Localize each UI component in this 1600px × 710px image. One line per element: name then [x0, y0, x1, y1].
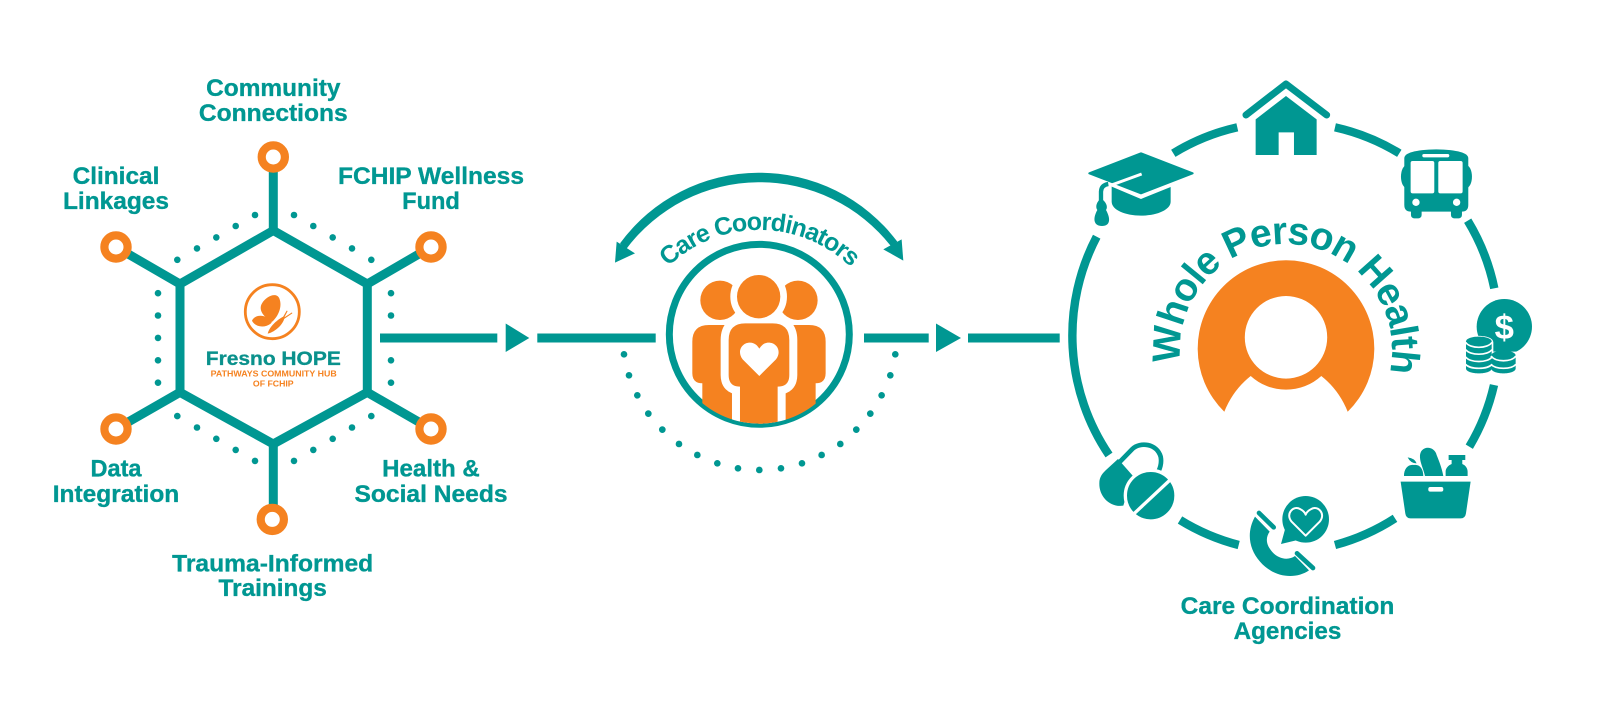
- icon: graduation cap: [1089, 153, 1193, 226]
- icon: double-headed arc arrow: [615, 173, 903, 263]
- icon: bus: [1401, 149, 1472, 218]
- label: Community Connections: Connections: [199, 100, 348, 127]
- dotted arc under circle: [621, 351, 899, 473]
- icon: phone with heart bubble: [1250, 496, 1329, 576]
- panel: Care Coordinators: [615, 172, 904, 474]
- logo: Fresno HOPE butterfly: OF FCHIP: [253, 378, 294, 388]
- icon: people with heart in circle: [669, 244, 849, 427]
- label: Data Integration: Data: [90, 456, 142, 483]
- label: FCHIP Wellness Fund: Fund: [402, 188, 460, 215]
- heading: Care Coordinators: Care Coordinators: [660, 214, 858, 265]
- orange ring nodes: [104, 145, 443, 531]
- label: Health & Social Needs: Health &: [382, 456, 480, 483]
- label: Clinical Linkages: Linkages: [63, 188, 169, 215]
- infographic: [54, 78, 1532, 644]
- icon: grocery basket: [1401, 448, 1471, 518]
- label: Care Coordination Agencies: Agencies: [1234, 618, 1341, 645]
- label: FCHIP Wellness Fund: FCHIP Wellness: [338, 163, 524, 190]
- hexagon with spokes: [116, 157, 431, 519]
- label: Trauma-Informed Trainings: Trauma-Informed: [172, 550, 373, 577]
- panel: Fresno HOPE hub: [53, 75, 524, 602]
- arrow: hub to care coordinators: [380, 324, 656, 352]
- ring segments: [1072, 127, 1494, 545]
- heading: Whole Person Health: Whole Person Health: [1152, 222, 1420, 372]
- label: Clinical Linkages: Clinical: [73, 163, 159, 190]
- panel: Whole Person Health ring: [1068, 80, 1532, 645]
- logo: Fresno HOPE butterfly: PATHWAYS COMMUNITY HUB: [211, 369, 337, 379]
- icon: medicine pills: [1099, 445, 1176, 521]
- label: Community Connections: Community: [206, 75, 341, 102]
- icon: person silhouette: [1198, 260, 1374, 412]
- label: Care Coordination Agencies: Care Coordination: [1181, 593, 1394, 620]
- arrow: care coordinators to whole person health: [864, 324, 1060, 352]
- icon: house: [1246, 84, 1327, 155]
- dotted hexagon outline: [155, 212, 394, 464]
- logo: Fresno HOPE butterfly: [206, 285, 341, 388]
- icon: coins with dollar sign: [1465, 299, 1532, 375]
- logo: Fresno HOPE butterfly: Fresno HOPE: [206, 349, 341, 370]
- label: Data Integration: Integration: [53, 481, 179, 508]
- icon: coins with dollar sign: $: [1495, 309, 1514, 347]
- label: Trauma-Informed Trainings: Trainings: [219, 575, 327, 602]
- label: Health & Social Needs: Social Needs: [354, 481, 508, 508]
